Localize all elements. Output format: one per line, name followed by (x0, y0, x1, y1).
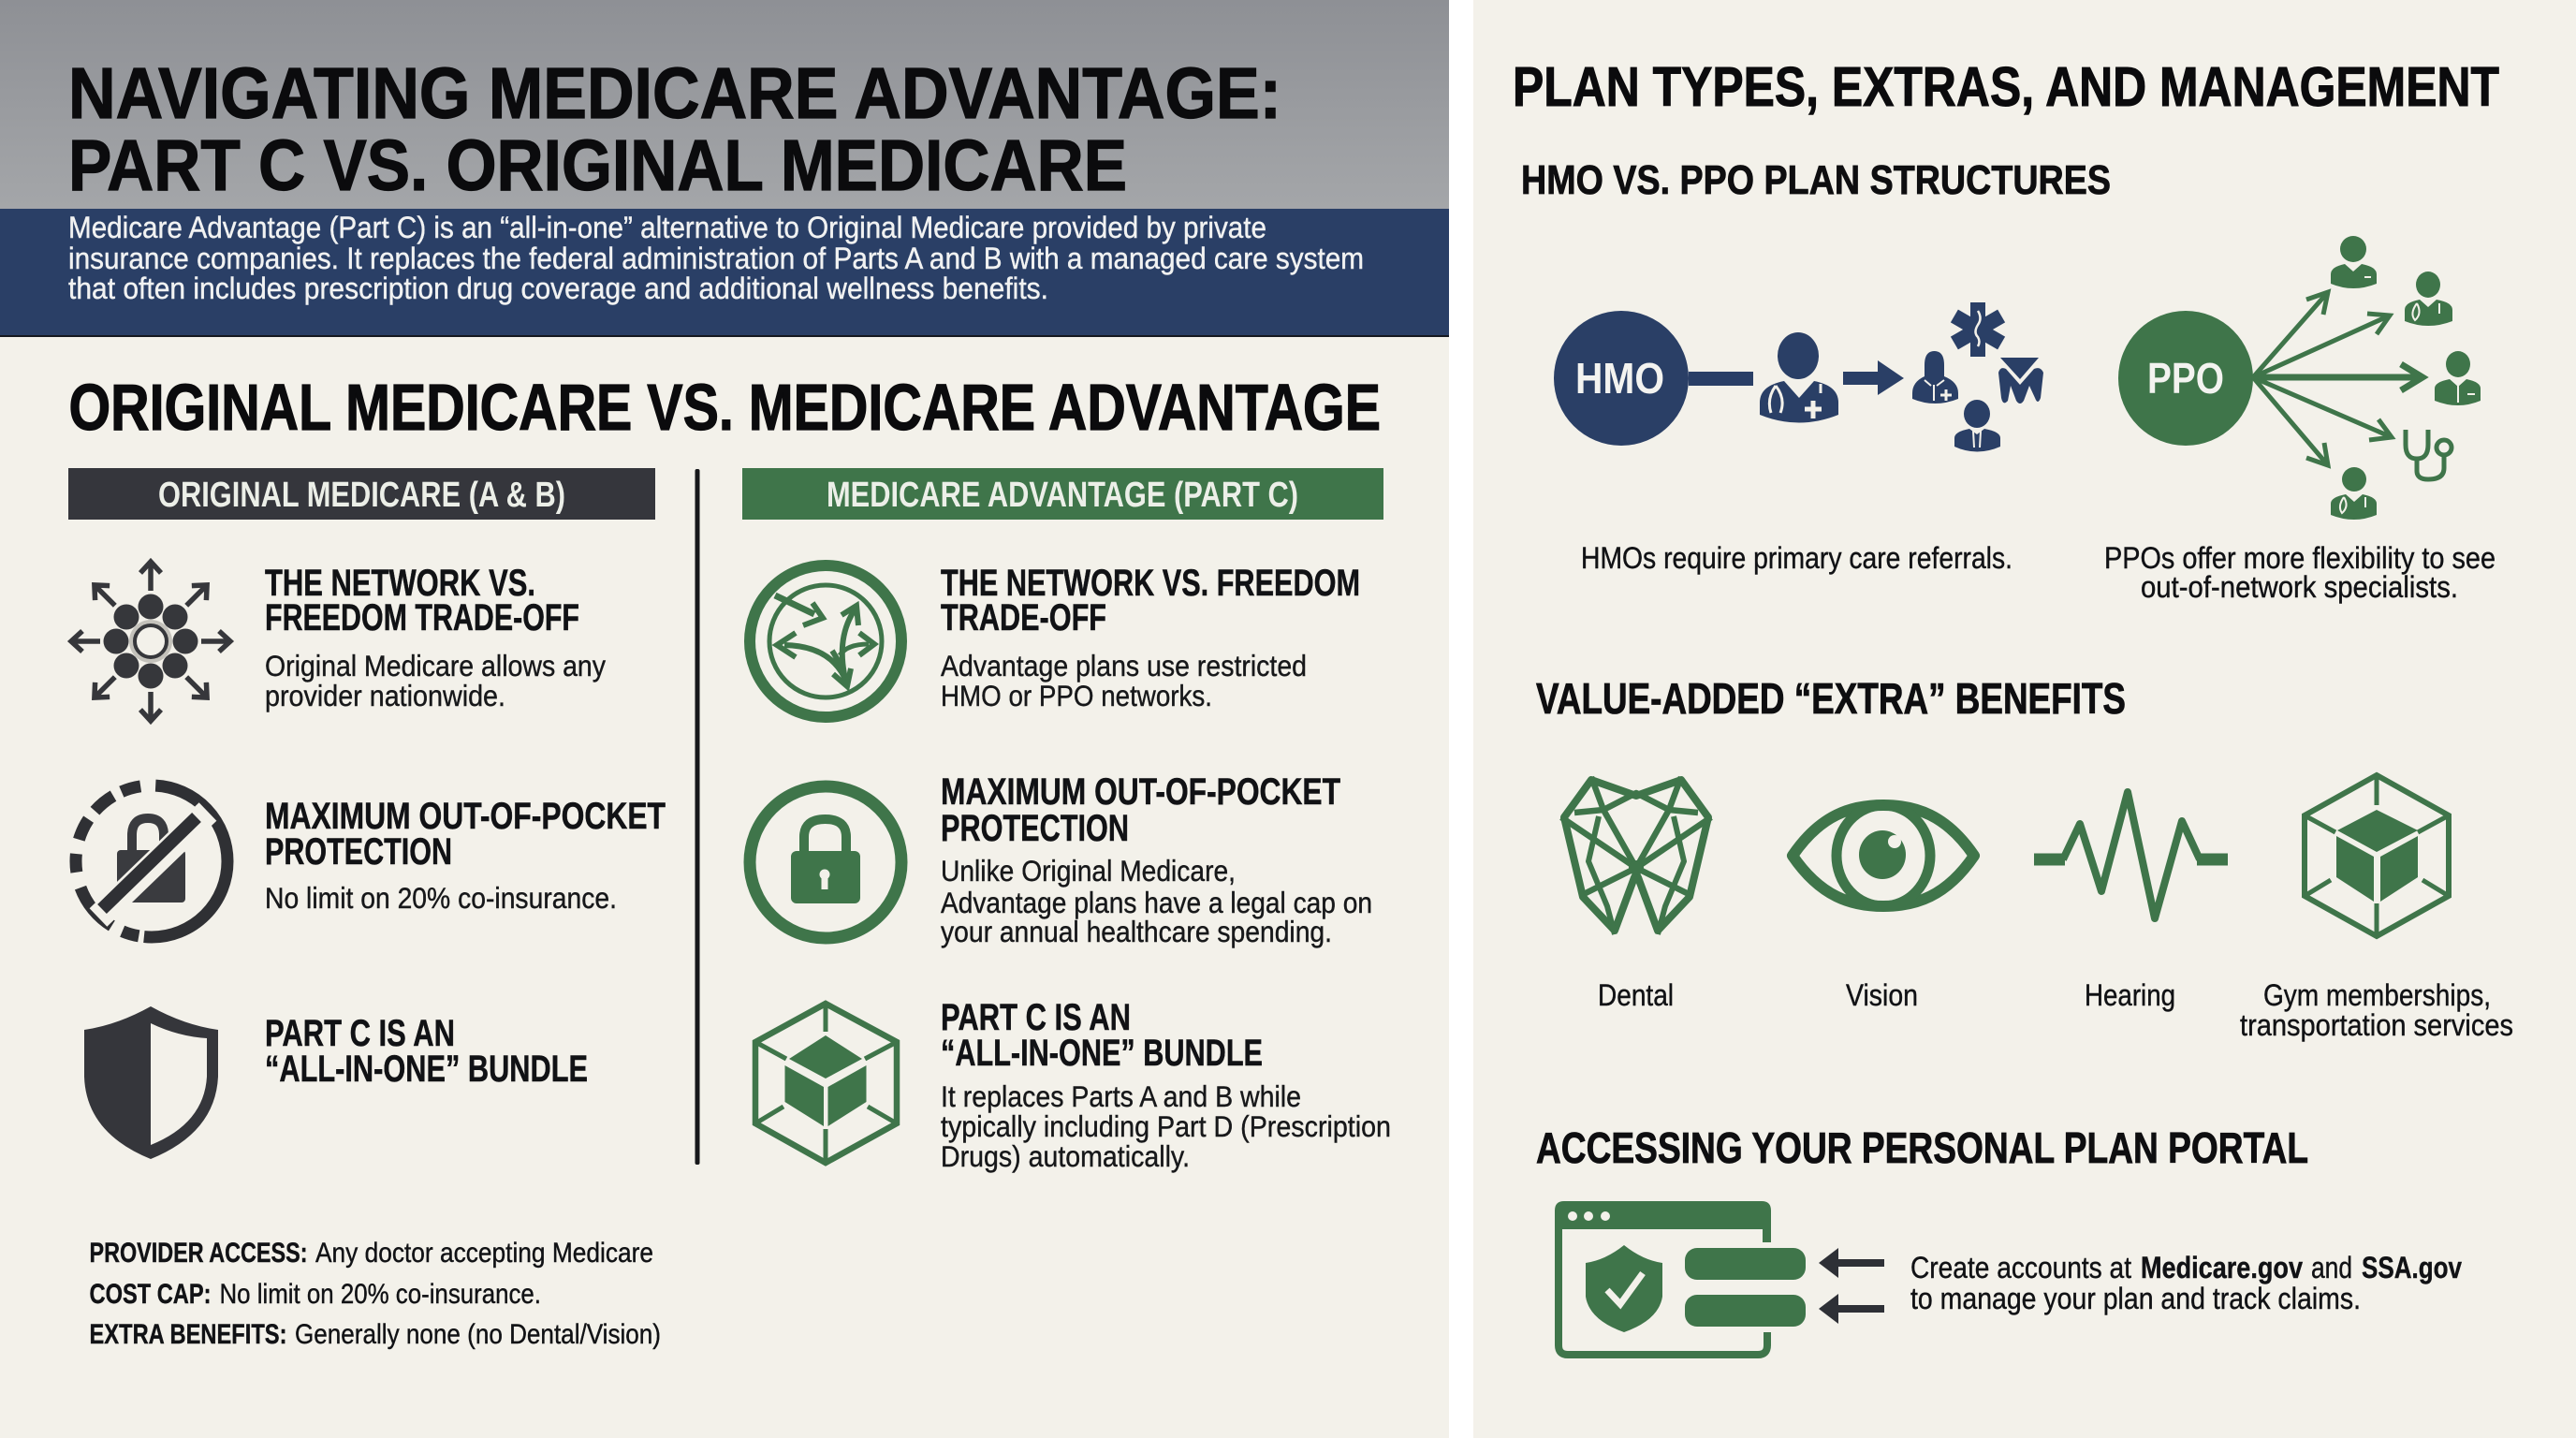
text block: advantage network: TRADE-OFF (941, 597, 1106, 638)
icon: vision (1793, 805, 1974, 906)
sub-heading: extra benefits: VALUE-ADDED “EXTRA” BENEFITS (1536, 674, 2126, 723)
text block: portal instructions: and (2311, 1251, 2352, 1284)
icon: network freedom (71, 562, 230, 721)
column header: original medicare: ORIGINAL MEDICARE (A & B) (158, 476, 565, 515)
text block: advantage bundle: “ALL-IN-ONE” BUNDLE (941, 1033, 1263, 1074)
column header: medicare advantage (742, 468, 1383, 520)
text block: original out-of-pocket (265, 796, 666, 915)
text block: original bundle: “ALL-IN-ONE” BUNDLE (265, 1049, 588, 1090)
text block: portal instructions (1910, 1251, 2462, 1315)
text block: advantage network (941, 563, 1360, 712)
column header: medicare advantage: MEDICARE ADVANTAGE (PART C) (827, 476, 1298, 515)
text block: original out-of-pocket: PROTECTION (265, 831, 452, 873)
intro text (68, 211, 1364, 305)
summary list: EXTRA BENEFITS: (90, 1319, 286, 1350)
login field bars (1685, 1248, 1806, 1327)
text block: portal instructions: to manage your plan and track claims. (1910, 1282, 2361, 1315)
labels: extra benefits: Hearing (2085, 978, 2175, 1012)
labels: extra benefits: Dental (1598, 978, 1674, 1012)
text block: original network: THE NETWORK VS. (265, 563, 535, 604)
text block: advantage out-of-pocket: Unlike Original Medicare, (941, 854, 1236, 888)
icon: green lock (750, 786, 901, 938)
icon: restricted network (750, 565, 901, 717)
intro text: that often includes prescription drug coverage and additional wellness benefits. (68, 271, 1048, 305)
header band: grey (0, 0, 1449, 209)
intro text: Medicare Advantage (Part C) is an “all-in-one” alternative to Original Medicare provided by private (68, 211, 1266, 244)
sub-heading: HMO vs PPO: HMO VS. PPO PLAN STRUCTURES (1521, 157, 2111, 203)
arrows: portal pointers (1819, 1248, 1884, 1324)
caption: PPO (2104, 541, 2496, 604)
intro text: insurance companies. It replaces the federal administration of Parts A and B with a managed care system (68, 242, 1364, 275)
icon: green cube bundle (755, 1004, 897, 1163)
text block: advantage bundle: Drugs) automatically. (941, 1139, 1190, 1173)
labels: extra benefits (1598, 978, 2513, 1042)
text block: advantage out-of-pocket: Advantage plans have a legal cap on (941, 886, 1372, 919)
text block: portal instructions: SSA.gov (2362, 1251, 2462, 1284)
labels: extra benefits: Vision (1846, 978, 1918, 1012)
icon: specialist cluster (1912, 302, 2043, 451)
text block: original bundle: PART C IS AN (265, 1013, 455, 1054)
text block: advantage out-of-pocket (941, 771, 1372, 948)
text block: advantage network: HMO or PPO networks. (941, 679, 1212, 712)
text block: original network (265, 563, 606, 712)
column divider (695, 469, 700, 1165)
summary list (90, 1238, 661, 1350)
text block: original bundle (265, 1013, 588, 1090)
HMO diagram (1554, 302, 2043, 451)
PPO diagram (2118, 236, 2481, 520)
panel: left comparison (0, 0, 1449, 1438)
icon: gym and transportation (2305, 775, 2449, 936)
text block: advantage bundle: typically including Part D (Prescription (941, 1109, 1391, 1143)
icon: browser portal (1555, 1201, 1806, 1355)
icon: half shield (84, 1006, 218, 1159)
title: NAVIGATING MEDICARE ADVANTAGE: (68, 53, 1281, 134)
text block: advantage out-of-pocket: your annual healthcare spending. (941, 915, 1332, 948)
summary list: COST CAP: (90, 1279, 212, 1310)
text block: advantage bundle: It replaces Parts A and B while (941, 1079, 1301, 1113)
text block: advantage bundle (941, 997, 1391, 1173)
text block: original out-of-pocket: No limit on 20% co-insurance. (265, 881, 617, 915)
summary list: Any doctor accepting Medicare (315, 1238, 653, 1269)
title (68, 53, 1281, 206)
text block: advantage out-of-pocket: PROTECTION (941, 808, 1129, 849)
caption: PPO: out-of-network specialists. (2141, 570, 2458, 604)
header band: navy (0, 209, 1449, 337)
summary list: No limit on 20% co-insurance. (219, 1279, 541, 1310)
text block: advantage network: Advantage plans use restricted (941, 649, 1307, 682)
text block: original network: provider nationwide. (265, 679, 505, 712)
icon: primary care doctor (1760, 332, 1838, 423)
title: PART C VS. ORIGINAL MEDICARE (68, 125, 1127, 206)
HMO diagram: HMO (1575, 354, 1664, 403)
arrow: referral (1843, 360, 1904, 395)
text block: advantage out-of-pocket: MAXIMUM OUT-OF-POCKET (941, 771, 1340, 813)
text block: original out-of-pocket: MAXIMUM OUT-OF-POCKET (265, 796, 666, 837)
arrows: open network (2253, 292, 2422, 465)
PPO diagram: PPO (2147, 354, 2224, 403)
icon: crossed-out lock (76, 785, 227, 937)
icon: hearing (2034, 792, 2228, 918)
text block: portal instructions: Medicare.gov (2141, 1251, 2303, 1284)
icon: security shield (1586, 1245, 1662, 1332)
summary list: Generally none (no Dental/Vision) (295, 1319, 661, 1350)
caption: HMO: HMOs require primary care referrals. (1581, 541, 2012, 575)
text block: advantage bundle: PART C IS AN (941, 997, 1131, 1038)
text block: portal instructions: Create accounts at (1910, 1251, 2131, 1284)
icons: out-of-network specialists (2331, 236, 2481, 520)
summary list: PROVIDER ACCESS: (90, 1238, 307, 1269)
text block: original network: Original Medicare allows any (265, 649, 606, 682)
panel: right plan types (1473, 0, 2576, 1438)
labels: extra benefits: Gym memberships, (2263, 978, 2491, 1012)
text block: advantage network: THE NETWORK VS. FREEDOM (941, 563, 1360, 604)
labels: extra benefits: transportation services (2240, 1008, 2513, 1042)
icon: dental (1561, 777, 1711, 934)
text block: original network: FREEDOM TRADE-OFF (265, 597, 579, 638)
section heading: ORIGINAL MEDICARE VS. MEDICARE ADVANTAGE (69, 371, 1381, 444)
sub-heading: plan portal: ACCESSING YOUR PERSONAL PLAN PORTAL (1536, 1123, 2308, 1172)
caption: PPO: PPOs offer more flexibility to see (2104, 541, 2496, 575)
column header: original medicare (68, 468, 655, 520)
